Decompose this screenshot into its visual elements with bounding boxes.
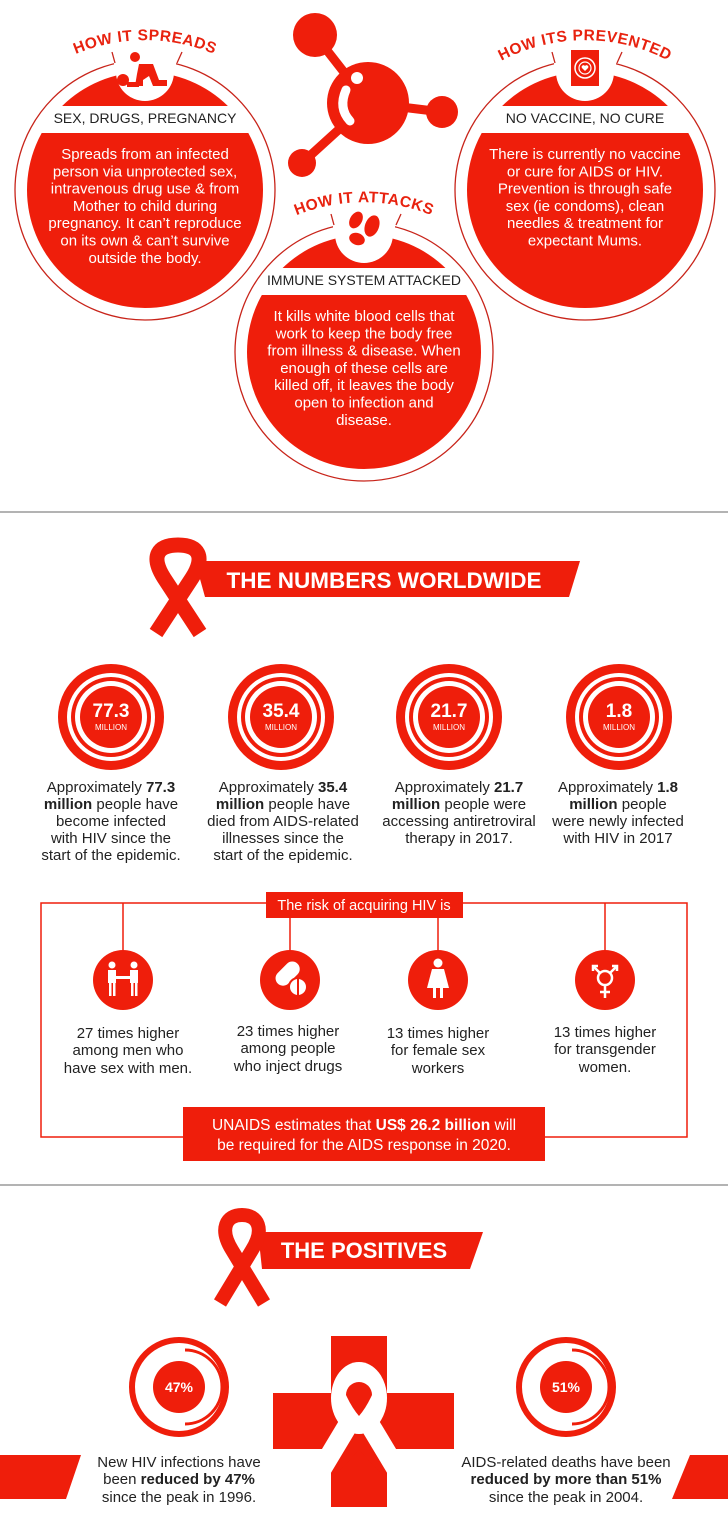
stat: 77.3 million: 77.3 — [93, 701, 129, 722]
stat: 77.3 million: Approximately 77.3 — [47, 779, 175, 796]
stat: 77.3 million: start of the epidemic. — [41, 847, 181, 864]
stat: 1.8 million: were newly infected — [551, 813, 684, 830]
heading: the numbers worldwide: THE NUMBERS WORLDWIDE — [227, 568, 541, 593]
text: risk items: 23 times higher — [237, 1023, 339, 1040]
stat: 77.3 million: MILLION — [95, 723, 127, 732]
stat: 21.7 million: accessing antiretroviral — [382, 813, 536, 830]
text: attacks body: from illness & disease. When — [267, 343, 461, 360]
text: prevented body: needles & treatment for — [507, 215, 663, 232]
text: attacks body: enough of these cells are — [280, 360, 448, 377]
text: risk items — [64, 1023, 656, 1077]
callout: UNAIDS estimate — [183, 1107, 545, 1161]
stat: 35.4 million: illnesses since the — [222, 830, 344, 847]
stat: 1.8 million: Approximately 1.8 — [558, 779, 678, 796]
stat: 51%: 51% — [552, 1379, 581, 1395]
text: prevented body: There is currently no vaccine — [489, 146, 681, 163]
stat: 77.3 million — [41, 664, 181, 864]
stat: 35.4 million — [207, 664, 359, 864]
stat: 77.3 million: with HIV since the — [50, 830, 171, 847]
panel: how it spreads: SEX, DRUGS, PREGNANCY — [54, 110, 237, 126]
icon: transgender symbol — [575, 950, 635, 1010]
heading: the positives: THE POSITIVES — [281, 1238, 447, 1263]
stat: 35.4 million: start of the epidemic. — [213, 847, 353, 864]
label: risk title: The risk of acquiring HIV is — [277, 898, 451, 914]
stat: 47%: 47% — [165, 1379, 194, 1395]
stat: 21.7 million: 21.7 — [431, 701, 467, 722]
stat: 51%: AIDS-related deaths have been — [461, 1454, 671, 1471]
icon: blood cells — [346, 209, 382, 247]
text: risk items: for transgender — [554, 1041, 656, 1058]
text: attacks body: killed off, it leaves the body — [274, 377, 454, 394]
icon: cross with ribbon — [273, 1336, 454, 1507]
text: attacks body: open to infection and — [294, 394, 434, 412]
icon: condom packet — [571, 50, 599, 86]
text: prevented body: or cure for AIDS or HIV. — [507, 163, 663, 180]
text: risk items: women. — [578, 1059, 631, 1076]
stat: 77.3 million: million people have — [44, 796, 178, 813]
decoration: side bars — [0, 1455, 81, 1499]
panel: risk of acquiring HIV — [41, 892, 687, 1161]
stat: 1.8 million — [551, 664, 684, 847]
stat: 21.7 million: MILLION — [433, 723, 465, 732]
text: spreads body: outside the body. — [88, 250, 202, 267]
icon: couple — [117, 52, 167, 87]
text: spreads body: on its own & can’t survive — [60, 232, 230, 250]
text: spreads body: person via unprotected sex, — [53, 163, 237, 180]
text: attacks body: work to keep the body free — [275, 325, 452, 342]
text: attacks body: disease. — [336, 412, 392, 429]
panel: how its prevented: NO VACCINE, NO CURE — [506, 110, 664, 126]
heading: how its prevented: HOW ITS PREVENTED — [498, 30, 671, 60]
stat: 47%: been reduced by 47% — [103, 1471, 255, 1488]
stat: 1.8 million: with HIV in 2017 — [562, 830, 673, 847]
text: prevented body: Prevention is through safe — [498, 181, 672, 198]
icon: pills — [260, 950, 320, 1010]
text: risk items: 13 times higher — [554, 1024, 656, 1041]
text: risk items: 27 times higher — [77, 1025, 179, 1042]
stat: 21.7 million: million people were — [392, 796, 526, 813]
panel: how its prevented — [454, 30, 716, 321]
icon: virus molecule — [288, 13, 458, 177]
stat: 51%: since the peak in 2004. — [489, 1489, 643, 1506]
stat: 35.4 million: million people have — [216, 796, 350, 813]
stat: 1.8 million: 1.8 — [606, 701, 632, 722]
text: prevented body: expectant Mums. — [528, 232, 642, 250]
panel: how it attacks: IMMUNE SYSTEM ATTACKED — [267, 272, 461, 288]
text: risk items: workers — [411, 1060, 464, 1077]
text: spreads body: intravenous drug use & from — [51, 181, 239, 198]
stat: 47%: New HIV infections have — [97, 1454, 261, 1471]
callout: UNAIDS estimate: UNAIDS estimates that US$ 26.2 billion will — [212, 1117, 516, 1134]
text: risk items: who inject drugs — [233, 1058, 342, 1075]
stat: 35.4 million: 35.4 — [263, 701, 300, 722]
stat: 47%: since the peak in 1996. — [102, 1489, 256, 1506]
text: prevented body: sex (ie condoms), clean — [506, 198, 664, 215]
text: risk items: among people — [240, 1040, 336, 1057]
stat: 51%: reduced by more than 51% — [471, 1471, 661, 1488]
text: attacks body: It kills white blood cells that — [274, 308, 455, 325]
panel: how it attacks — [234, 192, 494, 482]
heading: the positives — [220, 1215, 483, 1303]
callout: UNAIDS estimate: be required for the AIDS response in 2020. — [217, 1137, 511, 1154]
panel: how it spreads — [14, 29, 276, 321]
icon: woman — [408, 950, 468, 1010]
text: risk items: among men who — [73, 1042, 183, 1059]
stat: 47% — [97, 1340, 261, 1506]
heading: how it spreads: HOW IT SPREADS — [72, 29, 216, 54]
text: risk items: have sex with men. — [64, 1060, 192, 1077]
stat: 21.7 million: therapy in 2017. — [405, 830, 513, 847]
icon: two men — [93, 950, 153, 1010]
label: risk title — [266, 892, 463, 918]
text: spreads body: Mother to child during — [73, 198, 217, 215]
stat: 21.7 million: Approximately 21.7 — [395, 779, 523, 796]
stat: 21.7 million — [382, 664, 536, 847]
stat: 35.4 million: Approximately 35.4 — [219, 779, 347, 796]
stat: 1.8 million: million people — [569, 796, 667, 813]
heading: the numbers worldwide — [156, 545, 580, 633]
text: risk items: 13 times higher — [387, 1025, 489, 1042]
stat: 35.4 million: MILLION — [265, 723, 297, 732]
stat: 35.4 million: died from AIDS-related — [207, 813, 359, 830]
stat: 51% — [461, 1340, 671, 1506]
stat: 77.3 million: become infected — [56, 813, 166, 830]
text: spreads body: Spreads from an infected — [61, 146, 229, 163]
text: risk items: for female sex — [391, 1042, 486, 1059]
text: spreads body: pregnancy. It can’t reproduce — [48, 215, 242, 232]
heading: how it attacks: HOW IT ATTACKS — [294, 192, 434, 215]
stat: 1.8 million: MILLION — [603, 723, 635, 732]
